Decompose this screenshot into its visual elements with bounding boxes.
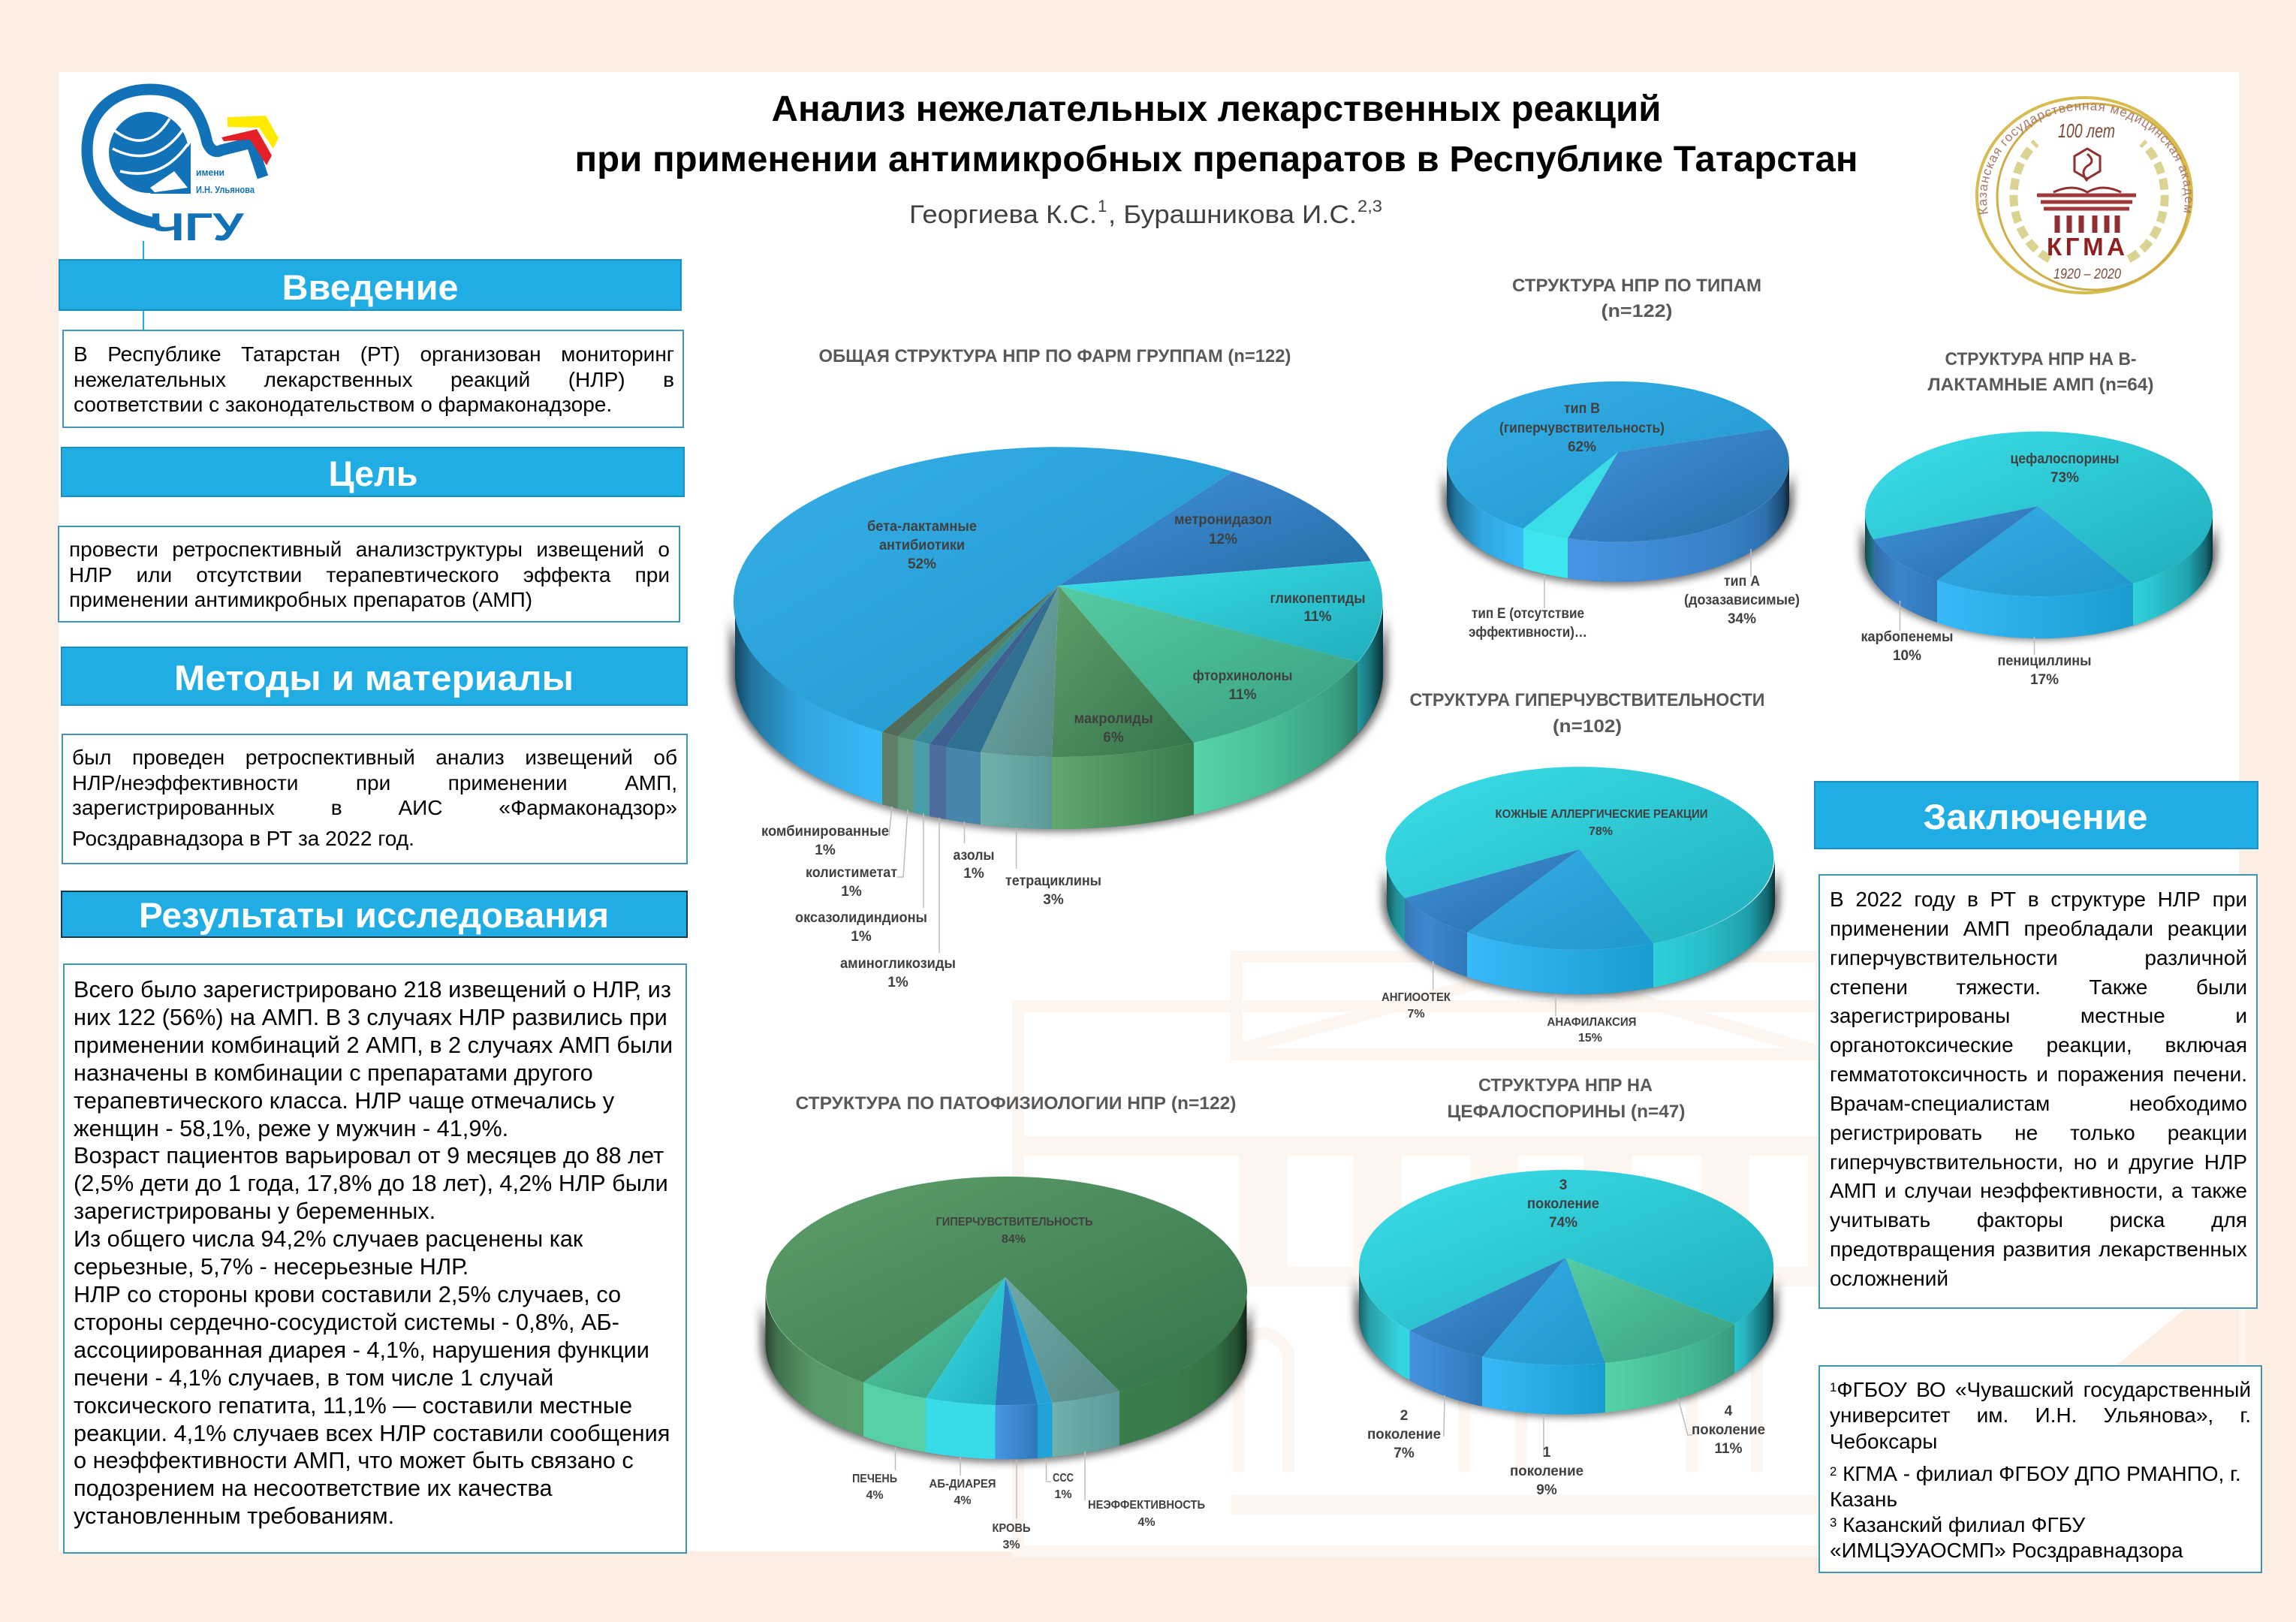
data labels: поколение <box>1527 1196 1599 1212</box>
heading: Методы и материалы <box>62 647 687 705</box>
text box: введение <box>62 330 684 428</box>
pie graphic <box>731 447 1387 831</box>
data labels: 1% <box>963 866 984 882</box>
affiliations paragraph: Чебоксары <box>1830 1430 1937 1453</box>
data labels: 62% <box>1568 439 1596 455</box>
data labels: 9% <box>1536 1482 1557 1498</box>
conclusion paragraph: Врачам-специалистам необходимо <box>1830 1092 2247 1115</box>
results paragraph: печени - 4,1% случаев, в том числе 1 случай <box>74 1364 553 1391</box>
data labels: 3% <box>1043 892 1064 908</box>
leader lines <box>889 806 1017 953</box>
data labels: тетрациклины <box>1005 873 1101 889</box>
results paragraph: терапевтического класса. НЛР чаще отмечались у <box>74 1087 614 1114</box>
results paragraph: установленным требованиям. <box>74 1503 394 1529</box>
chart title <box>1512 276 1761 321</box>
chart: структура НПР по типам <box>1443 276 1800 641</box>
data labels: АБ-ДИАРЕЯ <box>930 1478 996 1491</box>
conclusion paragraph: гиперчувствительности различной <box>1830 946 2247 969</box>
pie graphic <box>1383 767 1779 996</box>
data labels: карбопенемы <box>1861 629 1954 645</box>
conclusion paragraph: гиперчувствительности, но и другие НЛР <box>1830 1150 2247 1174</box>
data labels: колистиметат <box>806 865 897 881</box>
data labels: АНГИООТЕК <box>1382 991 1451 1004</box>
results paragraph: Из общего числа 94,2% случаев расценены как <box>74 1226 583 1252</box>
logo: ЧГУ university: ЧГУ <box>150 206 244 249</box>
results paragraph: ассоциированная диарея - 4,1%, нарушения функции <box>74 1337 649 1363</box>
chart title: (n=102) <box>1553 716 1622 737</box>
leader lines <box>895 1447 1085 1518</box>
data labels: 6% <box>1103 730 1124 746</box>
results paragraph: НЛР со стороны крови составили 2,5% случаев, со <box>74 1281 621 1307</box>
chart title: СТРУКТУРА НПР НА В- <box>1945 349 2137 369</box>
heading: Цель <box>62 448 684 496</box>
data labels: 4% <box>1137 1516 1156 1529</box>
results paragraph: Всего было зарегистрировано 218 извещений о НЛР, из <box>74 976 671 1002</box>
affiliations paragraph: университет им. И.Н. Ульянова», г. <box>1830 1403 2251 1427</box>
pie graphic <box>761 1177 1251 1461</box>
data labels: (дозазависимые) <box>1684 592 1800 608</box>
methods paragraph: НЛР/неэффективности при применении АМП, <box>72 770 677 794</box>
conclusion paragraph: АМП и случаи неэффективности, а также <box>1830 1179 2247 1202</box>
logo: КГМА <box>1975 96 2193 294</box>
data labels: 1% <box>815 843 836 858</box>
chart title: ЦЕФАЛОСПОРИНЫ (n=47) <box>1448 1102 1685 1122</box>
data labels <box>1367 1177 1765 1498</box>
heading: Методы и материалы: Методы и материалы <box>174 658 574 698</box>
watermark: lower right corner wedge <box>2087 1309 2240 1551</box>
results paragraph: стороны сердечно-сосудистой системы - 0,8%, АБ- <box>74 1309 619 1335</box>
conclusion paragraph: зарегистрированы местные и <box>1830 1004 2247 1027</box>
data labels <box>852 1216 1205 1551</box>
goal paragraph: применении антимикробных препаратов (АМП) <box>69 588 532 611</box>
data labels: поколение <box>1510 1464 1583 1479</box>
conclusion paragraph: осложнений <box>1830 1267 1948 1290</box>
authors: 1 <box>1098 197 1107 216</box>
data labels: КРОВЬ <box>993 1522 1030 1535</box>
results paragraph: назначены в комбинации с препаратами другого <box>74 1060 593 1086</box>
leader lines <box>1544 549 1751 608</box>
conclusion paragraph: применении АМП преобладали реакции <box>1830 917 2247 940</box>
chart: структура гиперчувствительности <box>1382 690 1779 1045</box>
results paragraph: женщин - 58,1%, реже у мужчин - 41,9%. <box>74 1115 508 1141</box>
chart title: СТРУКТУРА ГИПЕРЧУВСТВИТЕЛЬНОСТИ <box>1410 690 1764 710</box>
results paragraph: Возраст пациентов варьировал от 9 месяцев до 88 лет <box>74 1142 664 1168</box>
data labels: 4 <box>1725 1403 1733 1419</box>
data labels: 12% <box>1209 532 1237 547</box>
results paragraph: применении комбинаций 2 АМП, в 2 случаях АМП были <box>74 1032 673 1058</box>
logo: КГМА: 1920 – 2020 <box>2053 267 2121 282</box>
affiliations paragraph: 1ФГБОУ ВО «Чувашский государственный <box>1830 1378 2251 1401</box>
data labels: бета-лактамные <box>867 519 977 535</box>
heading: Результаты исследования: Результаты исследования <box>139 895 609 935</box>
results paragraph: зарегистрированы у беременных. <box>74 1198 435 1224</box>
text box: методы и материалы <box>62 734 688 864</box>
data labels: фторхинолоны <box>1192 668 1293 684</box>
data labels: тип Е (отсутствие <box>1472 606 1584 622</box>
results paragraph <box>74 976 673 1529</box>
results paragraph: реакции. 4,1% случаев всех НЛР составили сообщения <box>74 1419 670 1446</box>
logo: ЧГУ university: И.Н. Ульянова <box>196 184 255 195</box>
chart title <box>1448 1075 1685 1122</box>
results paragraph: подозрением на несоответствие их качества <box>74 1475 553 1501</box>
data labels: 3 <box>1559 1177 1567 1193</box>
data labels: 1% <box>851 929 872 945</box>
data labels: пенициллины <box>1997 653 2092 669</box>
data labels: антибиотики <box>879 538 965 553</box>
goal paragraph: провести ретроспективный анализструктуры извещений о <box>69 538 670 561</box>
data labels: 1% <box>887 975 908 990</box>
data labels: 84% <box>1002 1233 1026 1246</box>
leader lines <box>1900 601 2035 655</box>
title <box>575 89 1858 179</box>
results paragraph: них 122 (56%) на АМП. В 3 случаях НЛР развились при <box>74 1004 667 1030</box>
data labels: КОЖНЫЕ АЛЛЕРГИЧЕСКИЕ РЕАКЦИИ <box>1496 808 1707 821</box>
data labels: оксазолидиндионы <box>795 910 927 926</box>
conclusion paragraph <box>1830 888 2247 1290</box>
conclusion paragraph: предотвращения развития лекарственных <box>1830 1238 2247 1261</box>
text box: заключение <box>1818 874 2258 1309</box>
data labels: 1% <box>841 884 862 900</box>
data labels: 11% <box>1715 1441 1743 1457</box>
affiliations paragraph: 3 Казанский филиал ФГБУ <box>1830 1513 2085 1536</box>
data labels: 10% <box>1893 648 1921 664</box>
data labels: цефалоспорины <box>2011 451 2119 467</box>
affiliations paragraph: «ИМЦЭУАОСМП» Росздравнадзора <box>1830 1539 2183 1562</box>
affiliations paragraph: 2 КГМА - филиал ФГБОУ ДПО РМАНПО, г. <box>1830 1462 2241 1485</box>
pie graphic <box>1861 432 2216 638</box>
conclusion paragraph: В 2022 году в РТ в структуре НЛР при <box>1830 888 2247 911</box>
intro paragraph <box>74 342 674 416</box>
data labels: АНАФИЛАКСИЯ <box>1547 1016 1637 1029</box>
heading: Заключение <box>1815 782 2258 849</box>
logo: ЧГУ university <box>87 89 279 249</box>
chart title: ОБЩАЯ СТРУКТУРА НПР ПО ФАРМ ГРУППАМ (n=122) <box>818 346 1291 366</box>
text box: аффилиации <box>1818 1365 2262 1573</box>
chart: структура НПР на β-лактамные АМП <box>1861 349 2216 688</box>
results paragraph: токсического гепатита, 11,1% — составили местные <box>74 1392 632 1418</box>
heading: Введение <box>59 260 681 310</box>
data labels: макролиды <box>1074 711 1153 727</box>
chart title: СТРУКТУРА НПР НА <box>1478 1075 1653 1096</box>
logo: КГМА: 100 лет <box>2058 119 2115 142</box>
data labels: 1% <box>1054 1488 1072 1501</box>
data labels: поколение <box>1692 1422 1765 1438</box>
results paragraph: серьезные, 5,7% - несерьезные НЛР. <box>74 1253 469 1280</box>
data labels: гликопептиды <box>1270 591 1365 607</box>
logo: КГМА: КГМА <box>2047 233 2125 261</box>
intro paragraph: нежелательных лекарственных реакций (НЛР) в <box>74 368 674 390</box>
chart title: ЛАКТАМНЫЕ АМП (n=64) <box>1928 375 2153 395</box>
goal paragraph: НЛР или отсутствии терапевтического эффекта при <box>69 563 670 586</box>
authors: , Бурашникова И.С. <box>1108 200 1357 229</box>
authors: Георгиева К.С. <box>909 200 1097 229</box>
results paragraph: (2,5% дети до 1 года, 17,8% до 18 лет), 4,2% НЛР были <box>74 1170 668 1196</box>
data labels <box>761 512 1365 990</box>
data labels: 11% <box>1304 609 1332 625</box>
pie graphic <box>1443 381 1793 584</box>
data labels: 78% <box>1589 825 1613 838</box>
data labels: комбинированные <box>761 824 889 840</box>
data labels: 3% <box>1002 1539 1020 1551</box>
intro paragraph: В Республике Татарстан (РТ) организован мониторинг <box>74 342 674 366</box>
results paragraph: о неэффективности АМП, что может быть связано с <box>74 1447 634 1473</box>
data labels: тип В <box>1564 401 1600 417</box>
affiliations paragraph: Казань <box>1830 1488 1897 1511</box>
data labels: 4% <box>866 1489 884 1502</box>
chart title: СТРУКТУРА НПР ПО ТИПАМ <box>1512 276 1761 296</box>
goal paragraph <box>69 538 670 611</box>
chart: структура по патофизиологии НПР <box>761 1093 1251 1551</box>
data labels: 73% <box>2050 470 2079 486</box>
chart title: СТРУКТУРА ПО ПАТОФИЗИОЛОГИИ НПР (n=122) <box>796 1093 1236 1114</box>
data labels: 4% <box>954 1494 972 1507</box>
data labels: аминогликозиды <box>840 956 956 972</box>
data labels: 2 <box>1400 1408 1408 1424</box>
conclusion paragraph: регистрировать не только реакции <box>1830 1121 2247 1144</box>
data labels: 11% <box>1229 687 1257 703</box>
data labels: 7% <box>1407 1008 1425 1021</box>
conclusion paragraph: гемматотоксичность и поражения печени. <box>1830 1063 2247 1086</box>
chart: общая структура НПР по фарм группам <box>731 346 1387 990</box>
data labels: азолы <box>954 848 994 864</box>
data labels: 74% <box>1549 1215 1577 1231</box>
watermark: university building <box>1018 957 2239 1551</box>
affiliations paragraph <box>1830 1378 2251 1562</box>
methods paragraph: был проведен ретроспективный анализ извещений об <box>72 746 677 769</box>
data labels: 7% <box>1394 1446 1415 1461</box>
chart title <box>1410 690 1764 737</box>
data labels <box>1382 808 1707 1045</box>
data labels <box>1861 451 2119 688</box>
data labels: 15% <box>1578 1032 1602 1045</box>
conclusion paragraph: учитывать факторы риска для <box>1830 1208 2247 1232</box>
conclusion paragraph: органотоксические реакции, включая <box>1830 1033 2247 1057</box>
heading: Результаты исследования <box>62 891 687 937</box>
data labels: 17% <box>2030 672 2059 688</box>
title: при применении антимикробных препаратов в Республике Татарстан <box>575 140 1858 179</box>
chart title: (n=122) <box>1601 301 1673 321</box>
heading: Заключение: Заключение <box>1924 797 2147 837</box>
methods paragraph <box>72 746 677 850</box>
connector line <box>143 241 144 330</box>
methods paragraph: зарегистрированных в АИС «Фармаконадзор» <box>72 796 677 819</box>
text box: цель <box>58 526 680 623</box>
data labels: 52% <box>908 556 936 572</box>
methods paragraph: Росздравнадзора в РТ за 2022 год. <box>72 827 414 850</box>
text box: результаты исследования <box>63 963 687 1554</box>
data labels: эффективности)… <box>1469 625 1587 641</box>
data labels: тип А <box>1724 574 1760 589</box>
data labels: НЕЭФФЕКТИВНОСТЬ <box>1088 1499 1205 1512</box>
leader lines <box>1444 1395 1692 1457</box>
data labels: 1 <box>1543 1445 1551 1461</box>
chart: структура НПР на цефалоспорины <box>1355 1075 1777 1498</box>
authors: 2,3 <box>1357 197 1382 216</box>
heading: Введение: Введение <box>282 267 458 307</box>
authors <box>909 197 1382 229</box>
pie graphic <box>1355 1170 1777 1415</box>
data labels: (гиперчувствительность) <box>1499 421 1665 436</box>
data labels: 34% <box>1728 611 1756 627</box>
data labels: ССС <box>1053 1472 1074 1485</box>
heading: Цель: Цель <box>329 454 417 493</box>
leader lines <box>1433 961 1556 1016</box>
data labels: поколение <box>1367 1427 1441 1443</box>
data labels: ГИПЕРЧУВСТВИТЕЛЬНОСТЬ <box>936 1216 1093 1229</box>
conclusion paragraph: степени тяжести. Также были <box>1830 975 2247 999</box>
data labels: метронидазол <box>1174 512 1272 528</box>
title: Анализ нежелательных лекарственных реакций <box>772 89 1661 129</box>
logo: ЧГУ university: имени <box>196 167 224 178</box>
intro paragraph: соответствии с законодательством о фармаконадзоре. <box>74 393 612 416</box>
chart title <box>1928 349 2153 395</box>
data labels <box>1469 401 1800 641</box>
data labels: ПЕЧЕНЬ <box>852 1473 897 1485</box>
